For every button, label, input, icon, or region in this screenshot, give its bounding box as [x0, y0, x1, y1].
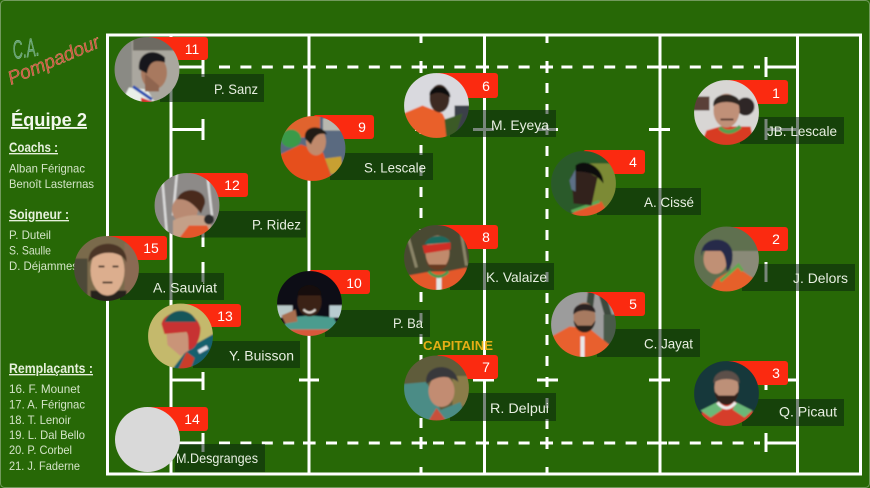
player 3: Q. Picaut: Q. Picaut: [779, 404, 837, 420]
player 3: Q. Picaut: [694, 360, 844, 426]
player 11: P. Sanz: 11: [185, 41, 199, 57]
player 2: J. Delors: 2: [772, 231, 780, 247]
logo: C.A. Pompadour: C.A.: [11, 33, 41, 65]
substitutes: [9, 361, 93, 473]
physios: D. Déjammes: [9, 259, 78, 273]
player 10: P. Ba: P. Ba: [393, 315, 423, 331]
substitutes: 20. P. Corbel: [9, 443, 72, 457]
player 15: A. Sauviat: 15: [143, 240, 159, 256]
player 9: S. Lescale: [280, 115, 433, 182]
player 13: Y. Buisson: [148, 303, 300, 369]
player 12: P. Ridez: 12: [224, 177, 240, 193]
player 12: P. Ridez: [154, 172, 306, 238]
coaches: [9, 140, 94, 191]
player 4: A. Cissé: 4: [629, 154, 637, 170]
player 4: A. Cissé: A. Cissé: [644, 194, 694, 210]
player 10: P. Ba: 10: [346, 275, 362, 291]
player 11: P. Sanz: P. Sanz: [214, 81, 258, 97]
substitutes: 19. L. Dal Bello: [9, 428, 85, 442]
player 5: C. Jayat: [550, 292, 700, 358]
player 2: J. Delors: J. Delors: [793, 270, 848, 286]
player 13: Y. Buisson: 13: [217, 308, 233, 324]
player 15: A. Sauviat: A. Sauviat: [153, 280, 217, 296]
player 5: C. Jayat: 5: [629, 296, 637, 312]
rugby pitch lines: [108, 35, 860, 474]
player 8: K. Valaize: [404, 224, 554, 290]
player 14: M. Desgranges (no photo): 14: [184, 411, 200, 427]
player 9: S. Lescale: S. Lescale: [364, 160, 426, 176]
coaches: Alban Férignac: [9, 162, 85, 176]
player 1: JB. Lescale: JB. Lescale: [767, 123, 837, 139]
player 6: M. Eyeya: M. Eyeya: [491, 117, 549, 133]
substitutes: 16. F. Mounet: [9, 382, 81, 396]
substitutes: Remplaçants :: [9, 361, 93, 376]
player 3: Q. Picaut: 3: [772, 365, 780, 381]
substitutes: 18. T. Lenoir: [9, 413, 71, 427]
physios: P. Duteil: [9, 228, 51, 242]
physios: [9, 207, 78, 273]
player 15: A. Sauviat: [74, 236, 224, 302]
logo: C.A. Pompadour: Pompadour: [5, 32, 104, 90]
player 1: JB. Lescale: [694, 80, 844, 146]
physios: S. Saulle: [9, 244, 51, 258]
player 5: C. Jayat: C. Jayat: [644, 336, 693, 352]
player 14: M. Desgranges (no photo): [115, 407, 265, 472]
player 8: K. Valaize: 8: [482, 229, 490, 245]
captain label: CAPITAINE: [423, 338, 493, 353]
player 7: R. Delpui: 7: [482, 359, 490, 375]
coaches: Coachs :: [9, 140, 58, 155]
player 6: M. Eyeya: [404, 72, 556, 138]
player 1: JB. Lescale: 1: [772, 85, 780, 101]
substitutes: 17. A. Férignac: [9, 398, 85, 412]
coaches: Benoît Lasternas: [9, 177, 94, 191]
physios: Soigneur :: [9, 207, 69, 222]
player 14: M. Desgranges (no photo): M.Desgranges: [176, 450, 258, 466]
player 2: J. Delors: [694, 226, 855, 292]
player 7: R. Delpui: [404, 355, 556, 421]
substitutes: 21. J. Faderne: [9, 459, 80, 473]
player 10: P. Ba: [276, 270, 430, 337]
player 13: Y. Buisson: Y. Buisson: [229, 348, 294, 364]
player 11: P. Sanz: [114, 36, 264, 106]
player 12: P. Ridez: P. Ridez: [252, 216, 301, 232]
team heading: Équipe 2: [11, 109, 87, 130]
player 6: M. Eyeya: 6: [482, 78, 490, 94]
player 8: K. Valaize: K. Valaize: [486, 269, 547, 285]
player 7: R. Delpui: R. Delpui: [490, 400, 549, 416]
player 4: A. Cissé: [550, 150, 701, 216]
player 9: S. Lescale: 9: [358, 119, 366, 135]
